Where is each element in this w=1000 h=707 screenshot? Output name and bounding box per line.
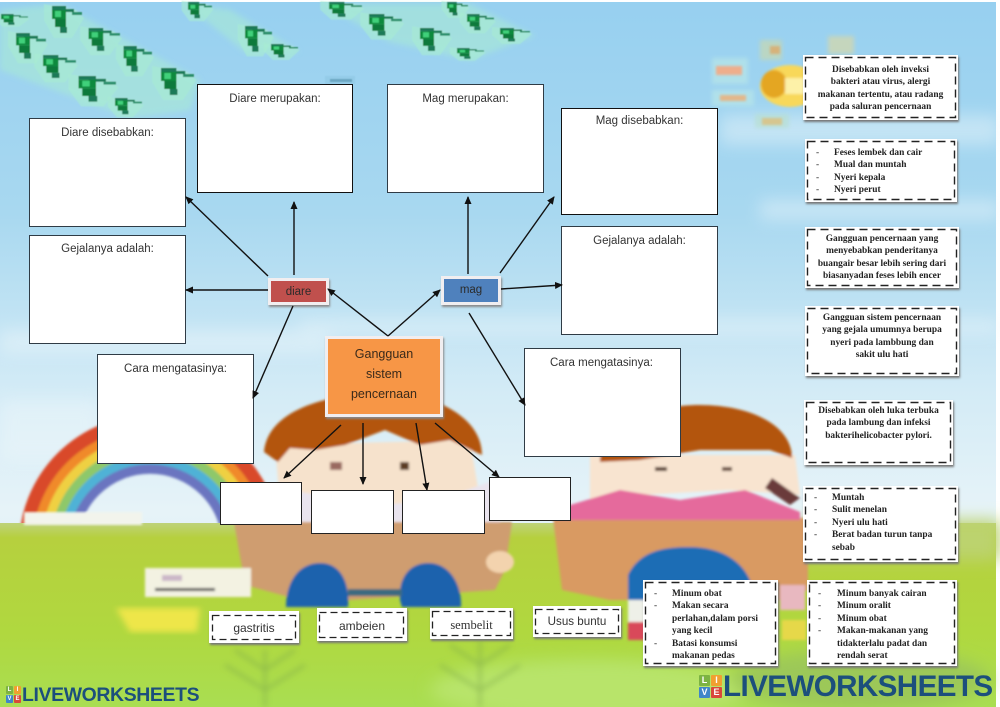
- text card: gejala diare: Mual dan muntah: [834, 160, 906, 170]
- logo: large Liveworksheets: V: [701, 687, 708, 697]
- text card: cara mengatasi mag: makanan pedas: [672, 651, 735, 661]
- text card: diare disebabkan: bakteri atau virus, alergi: [831, 77, 930, 87]
- grass: [0, 523, 996, 707]
- node: mag: mag: [460, 284, 482, 296]
- panel: Cara mengatasi mag: [524, 348, 681, 457]
- sun: [712, 36, 854, 128]
- logo: small Liveworksheets: I: [17, 687, 18, 693]
- text card: gejala mag: -: [814, 493, 817, 503]
- blank box 2: [311, 490, 394, 534]
- label: gastritis: gastritis: [233, 621, 275, 635]
- text card: diare disebabkan: Disebabkan oleh inveksi: [832, 65, 929, 75]
- text card: cara mengatasi diare: -: [818, 589, 821, 599]
- text card: cara mengatasi diare: Makan-makanan yang: [837, 626, 928, 636]
- logo: large Liveworksheets: I: [715, 675, 718, 685]
- text card: gejala diare: Nyeri kepala: [834, 173, 885, 183]
- text card: gejala diare: -: [816, 173, 819, 183]
- logo: large Liveworksheets: E: [713, 687, 720, 697]
- text card: gejala mag: Muntah: [832, 493, 864, 503]
- text card: gejala diare: [805, 139, 957, 202]
- text card: gejala diare: -: [816, 185, 819, 195]
- text card: mag merupakan: yang gejala umumnya berupa: [822, 325, 942, 335]
- panel: Gejala mag: [561, 226, 718, 335]
- text card: gejala mag: -: [814, 505, 817, 515]
- text card: mag merupakan: [805, 306, 959, 376]
- text card: mag merupakan: Gangguan sistem pencernaan: [823, 313, 941, 323]
- panel: Mag disebabkan: Mag disebabkan:: [596, 115, 683, 127]
- label: sembelit: sembelit: [450, 618, 493, 632]
- text card: cara mengatasi diare: [807, 580, 957, 666]
- panel: Gejala diare: [29, 235, 186, 344]
- panel: Gejala mag: Gejalanya adalah:: [593, 235, 686, 247]
- logo: small Liveworksheets: LIVEWORKSHEETS: [22, 684, 199, 706]
- rainbow: [26, 422, 274, 546]
- blank box 3: [402, 490, 485, 534]
- text card: gejala diare: Feses lembek dan cair: [834, 148, 922, 158]
- text card: mag merupakan: nyeri pada lambbung dan: [830, 338, 934, 348]
- label: Usus buntu: Usus buntu: [548, 615, 606, 628]
- logo: small Liveworksheets: L: [8, 687, 11, 693]
- label: ambeien: ambeien: [339, 619, 385, 633]
- text card: cara mengatasi mag: -: [654, 601, 657, 611]
- text card: diare disebabkan: makanan tertentu, atau radang: [818, 90, 943, 100]
- panel: Diare merupakan: Diare merupakan:: [229, 93, 321, 105]
- text card: mag disebabkan: bakterihelicobacter pylori.: [825, 431, 932, 441]
- label: sembelit: [430, 608, 513, 639]
- text card: diare disebabkan: [803, 55, 958, 120]
- logo: small Liveworksheets: E: [15, 696, 20, 702]
- logo: small Liveworksheets: V: [7, 696, 12, 702]
- panel: Mag disebabkan: [561, 108, 718, 215]
- node: diare: [268, 278, 329, 305]
- text card: gejala diare: Nyeri perut: [834, 185, 881, 195]
- logo: large Liveworksheets: LIVEWORKSHEETS: [723, 670, 992, 703]
- text card: mag merupakan: sakit ulu hati: [856, 350, 908, 360]
- text card: diare merupakan: buangair besar lebih sering dari: [818, 259, 946, 269]
- panel: Diare merupakan: [197, 84, 353, 193]
- node: central topic: Gangguan: [355, 347, 413, 361]
- text card: cara mengatasi diare: rendah serat: [837, 651, 888, 661]
- text card: diare merupakan: menyebabkan penderitanya: [826, 246, 938, 256]
- text card: mag disebabkan: Disebabkan oleh luka terbuka: [818, 406, 939, 416]
- text card: cara mengatasi mag: [643, 580, 778, 666]
- logo: large Liveworksheets: L: [702, 675, 707, 685]
- node: central topic: pencernaan: [351, 387, 417, 401]
- text card: mag disebabkan: pada lambung dan infeksi: [827, 418, 930, 428]
- text card: cara mengatasi diare: tidakterlalu padat dan: [837, 639, 927, 649]
- panel: Mag merupakan: [387, 84, 544, 193]
- panel: Gejala diare: Gejalanya adalah:: [61, 243, 154, 255]
- panel: Diare disebabkan: Diare disebabkan:: [61, 127, 154, 139]
- text card: gejala diare: -: [816, 160, 819, 170]
- text card: cara mengatasi diare: Minum banyak cairan: [837, 589, 927, 599]
- node: diare: diare: [286, 286, 311, 298]
- panel: Cara mengatasi mag: Cara mengatasinya:: [550, 357, 653, 369]
- text card: cara mengatasi diare: Minum obat: [837, 614, 887, 624]
- panel: Cara mengatasi diare: Cara mengatasinya:: [124, 363, 227, 375]
- text card: gejala diare: -: [816, 148, 819, 158]
- text card: cara mengatasi mag: -: [654, 589, 657, 599]
- node: central topic: [325, 336, 443, 417]
- label: gastritis: [209, 611, 299, 643]
- right child: [553, 518, 808, 600]
- text card: cara mengatasi diare: -: [818, 614, 821, 624]
- blank box 1: [220, 482, 302, 525]
- label: ambeien: [317, 608, 407, 641]
- text card: gejala mag: sebab: [832, 543, 855, 553]
- text card: gejala mag: [803, 486, 958, 562]
- text card: cara mengatasi mag: yang kecil: [672, 626, 712, 636]
- panel: Cara mengatasi diare: [97, 354, 254, 464]
- text card: cara mengatasi mag: -: [654, 639, 657, 649]
- text card: cara mengatasi mag: Minum obat: [672, 589, 722, 599]
- text card: cara mengatasi diare: -: [818, 601, 821, 611]
- text card: diare merupakan: [805, 227, 959, 288]
- left child: [234, 522, 512, 600]
- text card: gejala mag: Nyeri ulu hati: [832, 518, 888, 528]
- text card: diare merupakan: Gangguan pencernaan yang: [826, 234, 938, 244]
- text card: gejala mag: Berat badan turun tanpa: [832, 530, 932, 540]
- leaves: [0, 1, 535, 118]
- text card: diare merupakan: biasanyadan feses lebih encer: [823, 271, 941, 281]
- node: mag: [441, 276, 501, 305]
- panel: Diare disebabkan: [29, 118, 186, 227]
- label: Usus buntu: [533, 606, 621, 637]
- panel: Mag merupakan: Mag merupakan:: [422, 93, 509, 105]
- text card: cara mengatasi mag: perlahan,dalam porsi: [672, 614, 758, 624]
- text card: cara mengatasi diare: Minum oralit: [837, 601, 891, 611]
- text card: cara mengatasi mag: Batasi konsumsi: [672, 639, 737, 649]
- text card: gejala mag: Sulit menelan: [832, 505, 887, 515]
- text card: diare disebabkan: pada saluran pencernaan: [830, 102, 931, 112]
- text card: gejala mag: -: [814, 530, 817, 540]
- text card: cara mengatasi mag: Makan secara: [672, 601, 729, 611]
- text card: gejala mag: -: [814, 518, 817, 528]
- text card: cara mengatasi diare: -: [818, 626, 821, 636]
- blank box 4: [489, 477, 571, 521]
- text card: mag disebabkan: [804, 400, 953, 465]
- node: central topic: sistem: [366, 367, 402, 381]
